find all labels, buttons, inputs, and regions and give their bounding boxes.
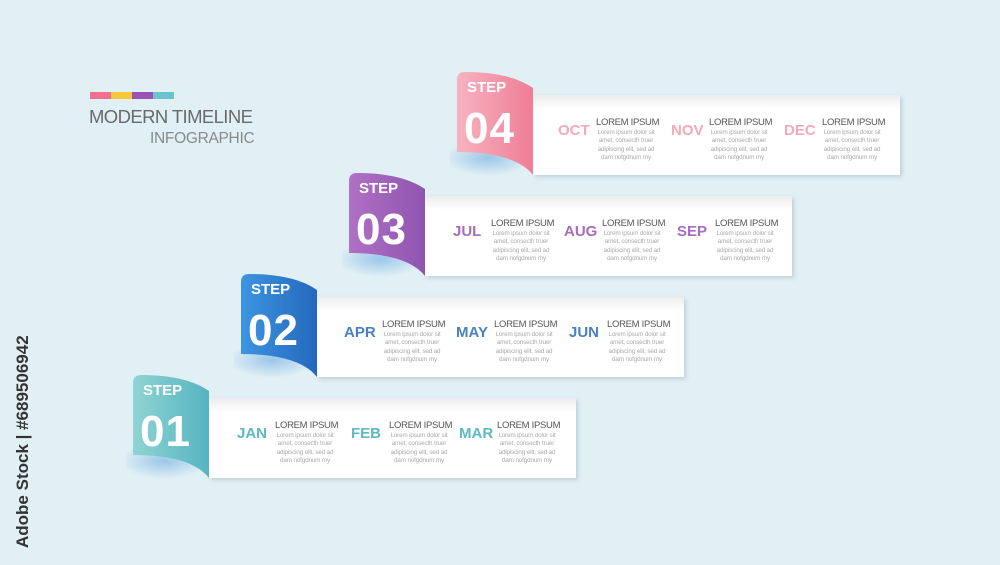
- step 1 panel: Lorem ipsum dolor sit amet, consecth truer adipiscing elit, sed ad dam nofgdnum my: [498, 432, 556, 464]
- watermark vertical text: Adobe Stock | #689506942: [13, 335, 32, 548]
- step 4 panel: [450, 72, 904, 178]
- tab 04: [450, 72, 533, 175]
- tab 03: 03: [356, 205, 407, 254]
- step 1 panel: Lorem ipsum dolor sit amet, consecth truer adipiscing elit, sed ad dam nofgdnum my: [390, 432, 448, 464]
- step 3 panel: Lorem ipsum dolor sit amet, consecth truer adipiscing elit, sed ad dam nofgdnum my: [603, 230, 661, 262]
- tab 03: STEP: [359, 180, 398, 197]
- heading: MODERN TIMELINE: [89, 106, 252, 127]
- step 4 panel: Lorem ipsum dolor sit amet, consecth truer adipiscing elit, sed ad dam nofgdnum my: [710, 129, 768, 161]
- step 4 panel: DEC: [784, 122, 816, 139]
- step 1 panel: Lorem ipsum dolor sit amet, consecth truer adipiscing elit, sed ad dam nofgdnum my: [276, 432, 334, 464]
- step 4 panel: LOREM IPSUM: [822, 117, 885, 128]
- tab 01: STEP: [143, 382, 182, 399]
- tab 02: STEP: [251, 281, 290, 298]
- title block: INFOGRAPHIC: [150, 130, 254, 147]
- step 1 panel: [126, 375, 580, 482]
- step 1 panel: JAN: [237, 425, 267, 442]
- tab 01: 01: [140, 407, 191, 456]
- step 1 panel: LOREM IPSUM: [497, 420, 560, 431]
- step 3 panel: [342, 173, 796, 280]
- step 2 panel: LOREM IPSUM: [494, 319, 557, 330]
- step 4 panel: Lorem ipsum dolor sit amet, consecth truer adipiscing elit, sed ad dam nofgdnum my: [597, 129, 655, 161]
- step 4 panel: OCT: [558, 122, 590, 139]
- step 3 panel: Lorem ipsum dolor sit amet, consecth truer adipiscing elit, sed ad dam nofgdnum my: [492, 230, 550, 262]
- step 2 panel: Lorem ipsum dolor sit amet, consecth truer adipiscing elit, sed ad dam nofgdnum my: [608, 331, 666, 363]
- step 1 panel: MAR: [459, 425, 493, 442]
- step 1 panel: FEB: [351, 425, 381, 442]
- step 3 panel: LOREM IPSUM: [602, 218, 665, 229]
- step 2 panel: JUN: [569, 324, 599, 341]
- step 1 panel: LOREM IPSUM: [389, 420, 452, 431]
- tab 02: 02: [248, 306, 299, 355]
- step 3 panel: JUL: [453, 223, 481, 240]
- step 3 panel: LOREM IPSUM: [715, 218, 778, 229]
- step 3 panel: Lorem ipsum dolor sit amet, consecth truer adipiscing elit, sed ad dam nofgdnum my: [716, 230, 774, 262]
- step 3 panel: AUG: [564, 223, 597, 240]
- step 2 panel: LOREM IPSUM: [382, 319, 445, 330]
- step 4 panel: NOV: [671, 122, 704, 139]
- title block: [89, 92, 254, 147]
- step 4 panel: LOREM IPSUM: [596, 117, 659, 128]
- step 2 panel: Lorem ipsum dolor sit amet, consecth truer adipiscing elit, sed ad dam nofgdnum my: [495, 331, 553, 363]
- step 4 panel: Lorem ipsum dolor sit amet, consecth truer adipiscing elit, sed ad dam nofgdnum my: [823, 129, 881, 161]
- step 1 panel: LOREM IPSUM: [275, 420, 338, 431]
- tab 01: [126, 375, 209, 478]
- step 2 panel: Lorem ipsum dolor sit amet, consecth truer adipiscing elit, sed ad dam nofgdnum my: [383, 331, 441, 363]
- step 4 panel: LOREM IPSUM: [709, 117, 772, 128]
- step 3 panel: LOREM IPSUM: [491, 218, 554, 229]
- tab 04: STEP: [467, 79, 506, 96]
- step 2 panel: LOREM IPSUM: [607, 319, 670, 330]
- color swatches: [90, 92, 174, 99]
- tab 03: [342, 173, 425, 276]
- tab 04: 04: [464, 104, 515, 153]
- step 3 panel: SEP: [677, 223, 707, 240]
- step 2 panel: MAY: [456, 324, 488, 341]
- tab 02: [234, 274, 317, 377]
- step 2 panel: APR: [344, 324, 376, 341]
- step 2 panel: [234, 274, 688, 380]
